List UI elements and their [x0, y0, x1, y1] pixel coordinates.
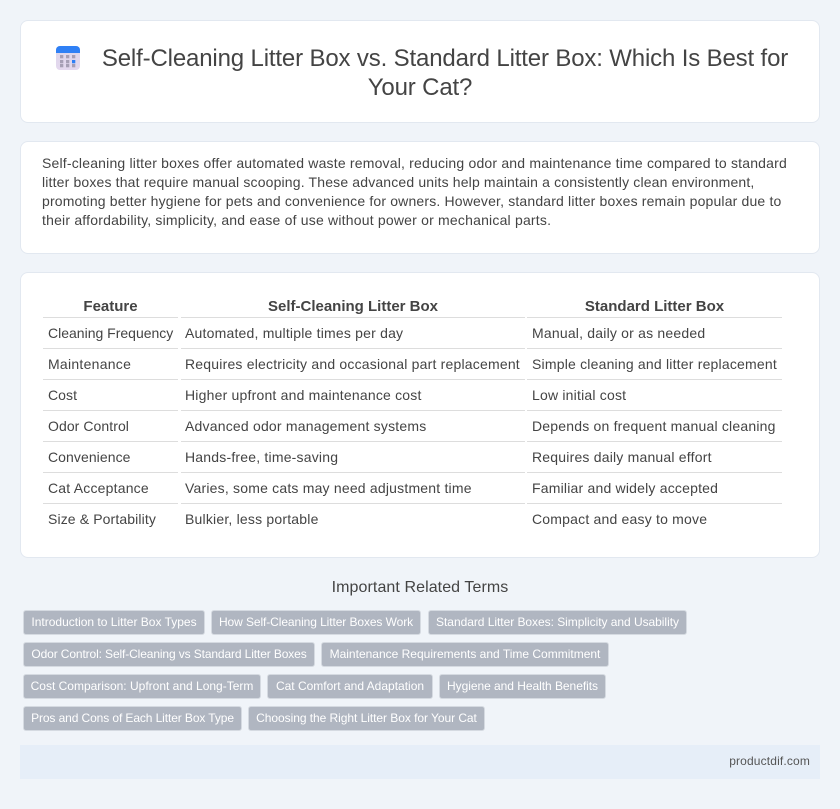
comparison table: Convenience — [48, 449, 130, 465]
related terms tags: Standard Litter Boxes: Simplicity and Usability — [436, 615, 679, 629]
comparison table: Cleaning Frequency — [48, 325, 173, 341]
comparison table: Size & Portability — [48, 511, 156, 527]
title: Your Cat? — [368, 74, 472, 101]
table card — [20, 272, 820, 558]
description text — [42, 155, 787, 228]
comparison table — [43, 298, 782, 527]
comparison table: Cat Acceptance — [48, 480, 149, 496]
title — [102, 45, 788, 101]
description text: their affordability, simplicity, and ease of use without power or mechanical parts. — [42, 212, 551, 228]
title: Self-Cleaning Litter Box vs. Standard Litter Box: Which Is Best for — [102, 45, 788, 72]
related terms tags: Pros and Cons of Each Litter Box Type — [31, 711, 234, 725]
description text: Self-cleaning litter boxes offer automated waste removal, reducing odor and maintenance time compared to standard — [42, 155, 787, 171]
comparison table: Automated, multiple times per day — [185, 325, 403, 341]
comparison table: Depends on frequent manual cleaning — [532, 418, 776, 434]
icon: calendar — [56, 46, 80, 70]
related terms heading: Important Related Terms — [332, 579, 508, 596]
description text: promoting better hygiene for pets and convenience for owners. However, standard litter boxes remain popular due to — [42, 193, 781, 209]
comparison table: Low initial cost — [532, 387, 626, 403]
comparison table: Higher upfront and maintenance cost — [185, 387, 422, 403]
footer source text: productdif.com — [729, 754, 810, 768]
related terms tags: Cat Comfort and Adaptation — [276, 679, 424, 693]
comparison table: Maintenance — [48, 356, 131, 372]
related terms tags: Maintenance Requirements and Time Commitment — [330, 647, 600, 661]
related terms tags: Cost Comparison: Upfront and Long-Term — [31, 679, 253, 693]
related terms tags — [23, 610, 687, 731]
comparison table: Requires electricity and occasional part replacement — [185, 356, 520, 372]
related terms tags: Odor Control: Self-Cleaning vs Standard Litter Boxes — [31, 647, 307, 661]
comparison table: Manual, daily or as needed — [532, 325, 705, 341]
comparison table: Familiar and widely accepted — [532, 480, 718, 496]
comparison table: Compact and easy to move — [532, 511, 707, 527]
comparison table: Odor Control — [48, 418, 129, 434]
description card — [20, 141, 820, 254]
comparison table: Feature — [83, 298, 138, 315]
related terms tags: Choosing the Right Litter Box for Your Cat — [256, 711, 477, 725]
comparison table: Hands-free, time-saving — [185, 449, 338, 465]
comparison table: Self-Cleaning Litter Box — [268, 298, 438, 315]
related terms tags: Introduction to Litter Box Types — [31, 615, 197, 629]
description text: litter boxes that require manual scooping. These advanced units help maintain a consistently clean environment, — [42, 174, 754, 190]
header card — [20, 20, 820, 123]
comparison table: Standard Litter Box — [585, 298, 724, 315]
footer bar — [20, 745, 820, 779]
comparison table: Simple cleaning and litter replacement — [532, 356, 777, 372]
related terms tags: Hygiene and Health Benefits — [447, 679, 598, 693]
comparison table: Advanced odor management systems — [185, 418, 426, 434]
comparison table: Varies, some cats may need adjustment time — [185, 480, 472, 496]
comparison table: Cost — [48, 387, 77, 403]
related terms tags: How Self-Cleaning Litter Boxes Work — [219, 615, 413, 629]
comparison table: Bulkier, less portable — [185, 511, 319, 527]
comparison table: Requires daily manual effort — [532, 449, 712, 465]
